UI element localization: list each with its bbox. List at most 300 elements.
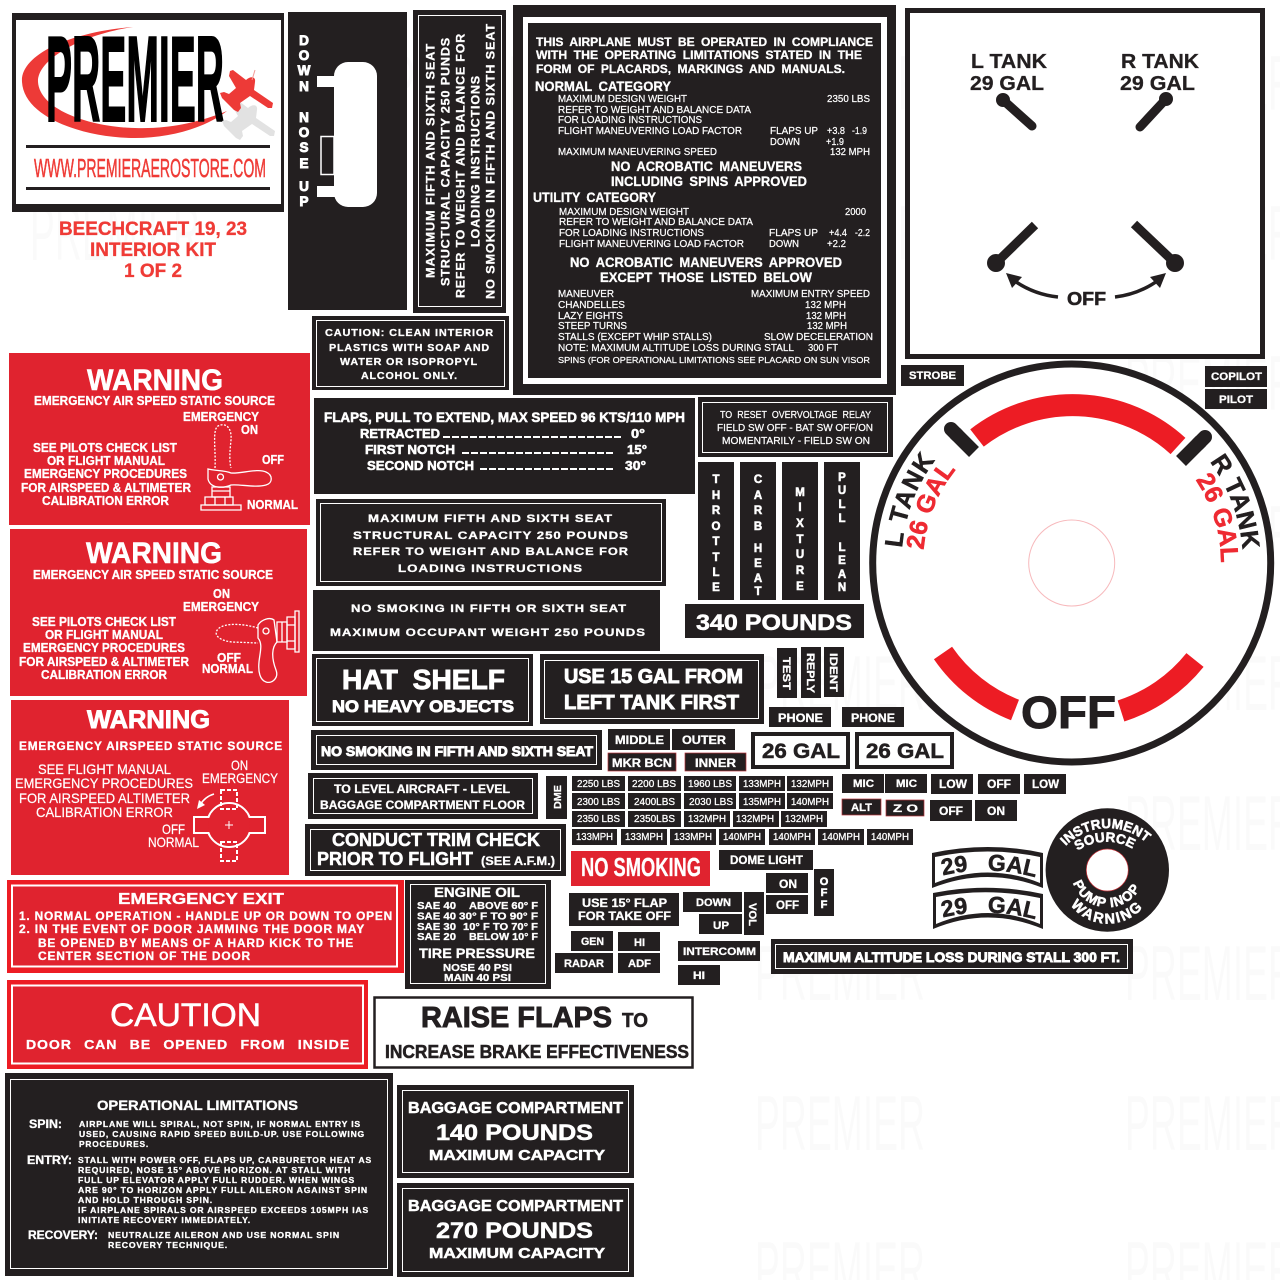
icon: red airplane [220,70,273,112]
panel: warning knob: EMERGENCY AIRSPEED STATIC SOURCE [19,741,283,753]
label: mkr bcn: MKR BCN [612,758,672,770]
label: on: ON [779,879,797,891]
off arrows [1012,279,1160,297]
table: weight and speed labels: 133MPH [576,831,613,843]
panel: warning lever up [9,353,310,525]
maneuver table: CHANDELLES [558,300,625,311]
entry text [27,1153,372,1225]
table: weight and speed labels: 2030 LBS [689,796,733,808]
entry text: ENTRY: [27,1153,72,1167]
table: weight and speed labels: 1960 LBS [688,778,732,790]
table: weight and speed labels: 132MPH [688,813,726,825]
panel: caution door [7,980,368,1069]
maneuver table: LAZY EIGHTS [558,311,623,322]
strip: carb heat: A [754,573,762,585]
panel: engine oil and tire pressure: ENGINE OIL [434,885,520,900]
utility category section: -2.2 [855,228,870,239]
label: adf [618,953,660,973]
panel: no smoking in fifth and sixth seat: NO SMOKING IN FIFTH AND SIXTH SEAT [321,744,594,759]
table: weight and speed labels: 140MPH [723,831,761,843]
panel: no smoking in fifth and sixth seat [311,730,602,770]
label: 340 pounds [685,604,864,638]
panel: warning lever up: EMERGENCY PROCEDURES [24,467,187,481]
table: weight and speed labels: 133MPH [743,778,781,790]
table: weight and speed labels: 133MPH [674,831,712,843]
utility category section: +4.4 [829,228,847,239]
strip: carb heat [740,462,776,600]
panel: engine oil and tire pressure: 10° F TO 70° F [463,921,539,933]
panel: warning lever sideways: EMERGENCY AIR SPEED STATIC SOURCE [33,568,273,582]
panel: raise flaps: INCREASE BRAKE EFFECTIVENESS [385,1042,689,1062]
table: weight and speed labels: 140MPH [822,831,860,843]
maneuver table: STALLS (EXCEPT WHIP STALLS) [558,332,712,343]
spin text [29,1119,365,1149]
panel: no smoking occupant weight: NO SMOKING IN FIFTH OR SIXTH SEAT [351,603,627,615]
sticker sheet: PREMIER [755,1079,925,1167]
strip: pull lean: U [838,485,846,497]
label: test: TEST [780,657,792,690]
panel: maximum fifth and sixth seat: REFER TO WEIGHT AND BALANCE FOR [353,546,629,558]
label: gen [571,931,613,951]
label: low [1024,774,1066,794]
compliance statement: WITH THE OPERATING LIMITATIONS STATED IN THE [536,48,862,62]
strip: mixture: R [796,565,805,577]
panel: warning lever sideways [10,529,307,696]
panel: L/R tank selector: OFF [1067,289,1106,309]
panel: warning lever sideways: OFF [217,651,241,665]
panel: L/R tank selector: R TANK [1121,51,1200,73]
label: curved 29 gal: 29 [941,898,967,918]
panel: maximum fifth and sixth seat: STRUCTURAL CAPACITY 250 POUNDS [353,530,629,542]
panel: down nose up trim: S [299,140,309,155]
dial red arcs [943,405,1195,711]
selector pointers [988,92,1184,272]
normal category section [535,78,870,189]
entry text: INITIATE RECOVERY IMMEDIATELY. [78,1215,251,1225]
chart: fuel selector dial [869,360,1274,766]
icon: airplane shadow [222,98,275,140]
panel: engine oil and tire pressure: BELOW 10° F [469,931,539,943]
label: up: UP [713,920,729,932]
label: low: LOW [939,779,967,791]
normal category section: FLIGHT MANEUVERING LOAD FACTOR [558,126,742,137]
strip: mixture: M [795,487,805,499]
icon: sideways static source lever [216,611,299,682]
label: ident: IDENT [827,653,839,692]
panel: emergency exit: 2. IN THE EVENT OF DOOR JAMMING THE DOOR MAY [19,922,365,936]
heading: kit title: BEECHCRAFT 19, 23 [59,219,247,240]
maneuver table: MANEUVER [558,289,614,300]
panel: warning knob: EMERGENCY PROCEDURES [15,775,193,791]
table: weight and speed labels: 135MPH [743,796,781,808]
heading: kit title: 1 OF 2 [124,261,182,282]
icon: instrument source disc: WARNING [1072,898,1142,924]
strip: pull lean: A [838,569,846,581]
table: weight and speed labels: 2350 LBS [577,813,620,825]
panel: warning lever sideways: ON [213,587,230,601]
label: middle: MIDDLE [615,735,664,747]
label: curved 29 gal [933,888,1043,929]
panel: maximum fifth and sixth seat [316,499,666,586]
label: phone [769,707,831,727]
panel: use 15 gal [540,654,764,724]
utility category section: NO ACROBATIC MANEUVERS APPROVED [570,255,842,270]
panel: maximum altitude loss [771,939,1133,974]
panel: hat shelf: HAT SHELF [342,664,505,695]
panel: hat shelf [312,654,533,726]
utility category section: FOR LOADING INSTRUCTIONS [559,228,704,239]
strip: throttle: T [712,552,720,564]
panel: vertical fifth and sixth seat placard: LOADING INSTRUCTIONS [468,75,482,247]
panel: hat shelf: NO HEAVY OBJECTS [332,697,514,716]
panel: use 15 gal: USE 15 GAL FROM [564,666,743,688]
panel: vertical fifth and sixth seat placard: STRUCTURAL CAPACITY 250 PUNDS [438,37,452,286]
panel: maximum fifth and sixth seat: LOADING INSTRUCTIONS [398,563,583,575]
normal category section: MAXIMUM MANEUVERING SPEED [558,147,717,158]
panel: caution door: DOOR CAN BE OPENED FROM INSIDE [26,1037,350,1052]
strip: mixture: X [796,518,804,530]
label: down: DOWN [696,897,731,909]
label: pilot: PILOT [1219,394,1253,406]
panel: engine oil and tire pressure: MAIN 40 PSI [444,972,511,984]
strip: throttle: T [712,536,720,548]
utility category section: REFER TO WEIGHT AND BALANCE DATA [559,217,753,228]
label: reply [801,647,821,698]
panel: warning lever up: OFF [262,453,284,467]
panel: engine oil and tire pressure: SAE 40 [417,900,456,912]
compliance statement [536,35,873,76]
panel: warning lever up: NORMAL [247,498,298,512]
table: weight and speed labels: 132MPH [785,813,823,825]
icon: instrument source disc [1046,808,1169,932]
label: mkr bcn [608,753,676,771]
panel: conduct trim check: PRIOR TO FLIGHT [317,848,474,869]
icon: instrument source disc: PUMP INOP [1072,879,1137,908]
label: ident [824,647,844,697]
label: dome light: DOME LIGHT [730,855,803,867]
normal category section: -1.9 [852,126,867,137]
panel: warning knob: NORMAL [148,834,199,850]
panel: to level aircraft: BAGGAGE COMPARTMENT FLOOR [320,798,525,812]
normal category section: 2350 LBS [827,94,870,105]
panel: overvoltage relay [698,397,893,457]
panel: warning lever sideways: FOR AIRSPEED & ALTIMETER [19,655,189,669]
entry text: IF AIRPLANE SPIRALS OR AIRSPEED EXCEEDS 105MPH IAS [78,1205,369,1215]
panel: conduct trim check: CONDUCT TRIM CHECK [332,829,541,850]
strip: mixture [782,462,818,600]
panel: engine oil and tire pressure: SAE 30 [417,921,456,933]
panel: flaps placard: 30° [625,459,646,473]
label: up [699,914,742,934]
panel: warning lever up: CALIBRATION ERROR [42,494,169,508]
panel: no smoking occupant weight [313,590,660,651]
strip: mixture: T [796,534,804,546]
utility category section: 2000 [845,207,866,218]
panel: baggage 140 pounds [397,1085,634,1178]
panel: down nose up trim: W [298,63,311,78]
label: middle [608,729,670,750]
label: outer: OUTER [682,735,727,747]
panel: down nose up trim: D [299,33,309,48]
table: weight and speed labels: 132MPH [736,813,774,825]
entry text: REQUIRED, NOSE 15° ABOVE HORIZON. AT STALL WITH [78,1165,351,1175]
label: dme [546,776,567,819]
strip: pull lean: L [838,542,846,554]
chart: fuel selector dial: 26 GAL [1196,473,1238,562]
panel: caution clean interior: WATER OR ISOPROPYL [340,357,478,368]
label: alt [842,799,881,815]
label: curved 29 gal [932,847,1043,888]
label: off: OFF [987,779,1011,791]
strip: throttle: H [712,490,720,502]
normal category section: NORMAL CATEGORY [535,78,672,94]
panel: emergency exit: BE OPENED BY MEANS OF A HARD KICK TO THE [38,936,354,950]
strip: throttle: L [712,567,720,579]
strip: carb heat: B [754,521,762,533]
panel: baggage 140 pounds: BAGGAGE COMPARTMENT [408,1100,623,1117]
panel: operational limitations: OPERATIONAL LIMITATIONS [97,1098,298,1113]
panel: warning knob: CALIBRATION ERROR [36,804,173,820]
panel: warning knob: EMERGENCY [202,770,279,786]
panel: flaps placard: 15° [627,443,647,457]
icon: instrument source disc: INSTRUMENT [1060,818,1152,846]
entry text: FULL UP ELEVATOR APPLY FULL RUDDER. WHEN WINGS [78,1175,355,1185]
strip: carb heat: C [754,474,762,486]
label: alt: ALT [851,802,872,814]
panel: overvoltage relay: MOMENTARILY - FIELD SW ON [722,436,870,447]
label: pilot [1205,389,1267,409]
panel: emergency exit: 1. NORMAL OPERATION - HANDLE UP OR DOWN TO OPEN [19,909,393,923]
panel: baggage 270 pounds: 270 POUNDS [436,1218,593,1243]
panel: warning knob: WARNING [87,706,210,734]
panel: engine oil and tire pressure [405,880,551,989]
table: weight and speed labels: 2300 LBS [577,796,620,808]
label: strobe [901,365,964,386]
utility category section: MAXIMUM DESIGN WEIGHT [559,207,689,218]
chart: fuel selector dial: R TANK [1210,453,1260,550]
label: phone: PHONE [851,713,895,725]
label: curved 29 gal: GAL [988,854,1036,878]
label: 26 gal [857,734,952,767]
chart: fuel selector dial: 26 GAL [906,467,956,550]
label: down [683,892,742,912]
table: weight and speed labels: 133MPH [625,831,663,843]
strip: throttle: T [712,474,720,486]
strip: throttle: R [712,505,721,517]
spin text: AIRPLANE WILL SPIRAL, NOT SPIN, IF NORMAL ENTRY IS [79,1119,361,1129]
label: hi [618,932,660,951]
label: dome light [719,850,813,870]
label: inner [685,753,746,771]
icon: static source lever [201,425,271,510]
sticker sheet: PREMIER [755,639,925,727]
sticker sheet: PREMIER [30,39,200,127]
entry text: STALL WITH POWER OFF, FLAPS UP, CARBURETOR HEAT AS [78,1155,372,1165]
panel: caution clean interior [312,316,509,390]
panel: down nose up trim: U [299,179,309,194]
label: radar: RADAR [564,958,604,970]
table: weight and speed labels: 2400LBS [634,796,675,808]
utility category section: DOWN [769,239,799,250]
label: mic: MIC [853,778,874,790]
normal category section: FOR LOADING INSTRUCTIONS [558,115,702,126]
normal category section: DOWN [770,137,800,148]
logo url: WWW.PREMIERAEROSTORE.COM [34,153,266,183]
utility category section: UTILITY CATEGORY [533,189,657,205]
panel: flaps placard: FIRST NOTCH [365,443,455,457]
label: hi: HI [634,937,645,949]
panel: engine oil and tire pressure: SAE 40 [417,910,456,922]
label: outer [672,729,735,750]
panel: engine oil and tire pressure: NOSE 40 PSI [443,962,512,974]
maneuver table: 132 MPH [805,300,846,311]
panel: warning lever sideways: EMERGENCY PROCEDURES [23,641,185,655]
label: 26 gal: 26 GAL [866,740,944,763]
panel: baggage 270 pounds: BAGGAGE COMPARTMENT [408,1198,623,1215]
sticker sheet: PREMIER [30,339,200,427]
label: gen: GEN [581,936,604,948]
utility category section: FLAPS UP [769,228,818,239]
label: vertical off [814,869,834,916]
label: copilot: COPILOT [1211,371,1262,383]
maneuver table: NOTE: MAXIMUM ALTITUDE LOSS DURING STALL [558,343,794,354]
table: weight and speed labels: 140MPH [791,796,829,808]
panel: vertical fifth and sixth seat placard [413,10,506,313]
label: low [931,774,973,794]
label: 26 gal [753,734,848,767]
utility category section [533,189,870,285]
panel: emergency exit: EMERGENCY EXIT [118,891,284,908]
recovery text: NEUTRALIZE AILERON AND USE NORMAL SPIN [108,1230,340,1240]
compliance statement: FORM OF PLACARDS, MARKINGS AND MANUALS. [536,62,845,76]
table: weight and speed labels: 140MPH [773,831,811,843]
strip: mixture: E [796,581,804,593]
panel: warning lever sideways: CALIBRATION ERROR [41,668,167,682]
label: mic [885,774,927,793]
panel: caution clean interior: PLASTICS WITH SOAP AND [329,343,490,354]
label: intercomm [678,941,760,961]
label: test [777,648,797,698]
sticker sheet: PREMIER [46,11,224,147]
label: vertical off: F [821,899,828,911]
panel: L/R tank selector: 29 GAL [970,73,1044,95]
sticker sheet: PREMIER [390,39,560,127]
maneuver table: SPINS (FOR OPERATIONAL LIMITATIONS SEE PLACARD ON SUN VISOR [558,355,870,365]
normal category section: REFER TO WEIGHT AND BALANCE DATA [558,105,751,116]
compliance statement: THIS AIRPLANE MUST BE OPERATED IN COMPLIANCE [536,35,873,49]
label: strobe: STROBE [909,370,956,382]
panel: L/R tank selector: 29 GAL [1120,73,1195,95]
panel: down nose up trim [288,12,407,310]
panel: operating limitations placard [513,5,896,395]
label: vol [744,892,764,935]
table: weight and speed labels: 132MPH [791,778,829,790]
label: phone [842,707,904,727]
strip: carb heat: E [754,558,762,570]
label: mic [842,774,884,793]
panel: warning knob: SEE FLIGHT MANUAL [38,761,171,777]
label: inner: INNER [695,758,737,770]
panel: warning lever sideways: EMERGENCY [183,600,260,614]
panel: baggage 270 pounds [397,1183,634,1277]
panel: maximum fifth and sixth seat: MAXIMUM FIFTH AND SIXTH SEAT [368,513,613,525]
maneuver table: MAXIMUM ENTRY SPEED [751,289,870,300]
panel: vertical fifth and sixth seat placard: MAXIMUM FIFTH AND SIXTH SEAT [424,43,438,278]
panel: down nose up trim: E [299,156,309,171]
table: weight and speed labels: 2350LBS [634,813,675,825]
heading: kit title [59,219,247,282]
label: use 15 flap [569,893,679,926]
label: 26 gal: 26 GAL [762,740,840,763]
panel: down nose up trim: N [299,110,309,125]
recovery text: RECOVERY TECHNIQUE. [108,1240,228,1250]
panel: operational limitations [5,1073,393,1276]
panel: engine oil and tire pressure: SAE 20 [417,931,456,943]
label: rotated on: Z O [893,803,919,815]
panel: warning lever up: OR FLIGHT MANUAL [47,454,165,468]
label: on: ON [987,806,1005,818]
panel: warning lever sideways: WARNING [86,537,222,570]
panel: vertical fifth and sixth seat placard: REFER TO WEIGHT AND BALANCE FOR [454,33,468,298]
panel: down nose up trim: N [299,79,309,94]
entry text: AND HOLD THROUGH SPIN. [78,1195,213,1205]
label: 340 pounds: 340 POUNDS [696,610,852,635]
label: off [978,774,1020,794]
label: low: LOW [1032,779,1059,791]
recovery text [28,1228,340,1250]
table: weight and speed labels: 2250 LBS [577,778,620,790]
panel: emergency exit: CENTER SECTION OF THE DOOR [38,949,251,963]
normal category section: +1.9 [826,137,844,148]
panel: warning lever sideways: NORMAL [202,662,253,676]
panel: Premier logo [12,11,284,212]
panel: flaps placard: RETRACTED [360,427,440,441]
strip: carb heat: H [754,543,762,555]
label: on [766,873,808,893]
strip: carb heat: A [754,490,762,502]
label: use 15 flap: USE 15° FLAP [582,898,667,910]
label: dme: DME [552,785,564,809]
label: vol: VOL [746,903,758,926]
recovery text: RECOVERY: [28,1228,98,1242]
panel: conduct trim check [305,824,566,876]
panel: use 15 gal: LEFT TANK FIRST [564,692,739,714]
maneuver table: 132 MPH [806,311,846,322]
table: weight and speed labels: 140MPH [871,831,909,843]
label: use 15 flap: FOR TAKE OFF [578,911,671,923]
panel: warning lever sideways: OR FLIGHT MANUAL [45,628,163,642]
label: mic: MIC [896,778,917,790]
panel: warning lever sideways: SEE PILOTS CHECK LIST [32,615,176,629]
maneuver table: 132 MPH [807,321,847,332]
strip: throttle: O [712,521,721,533]
maneuver table: STEEP TURNS [558,321,627,332]
label: adf: ADF [628,958,651,970]
label: off [930,800,972,821]
normal category section: FLAPS UP [770,126,818,137]
label: copilot [1205,366,1267,387]
panel: warning lever up: ON [241,423,258,437]
sticker sheet: PREMIER [755,39,925,127]
strip: pull lean: L [838,499,846,511]
panel: caution door: CAUTION [110,997,261,1033]
label: no smoking red: NO SMOKING [581,852,701,882]
panel: flaps placard: FLAPS, PULL TO EXTEND, MAX SPEED 96 KTS/110 MPH [324,410,685,425]
strip: pull lean: N [838,582,846,594]
spin text: USED, CAUSING RAPID SPEED BUILD-UP. USE FOLLOWING [79,1129,365,1139]
normal category section: +3.8 [827,126,845,137]
label: intercomm: INTERCOMM [683,946,756,958]
